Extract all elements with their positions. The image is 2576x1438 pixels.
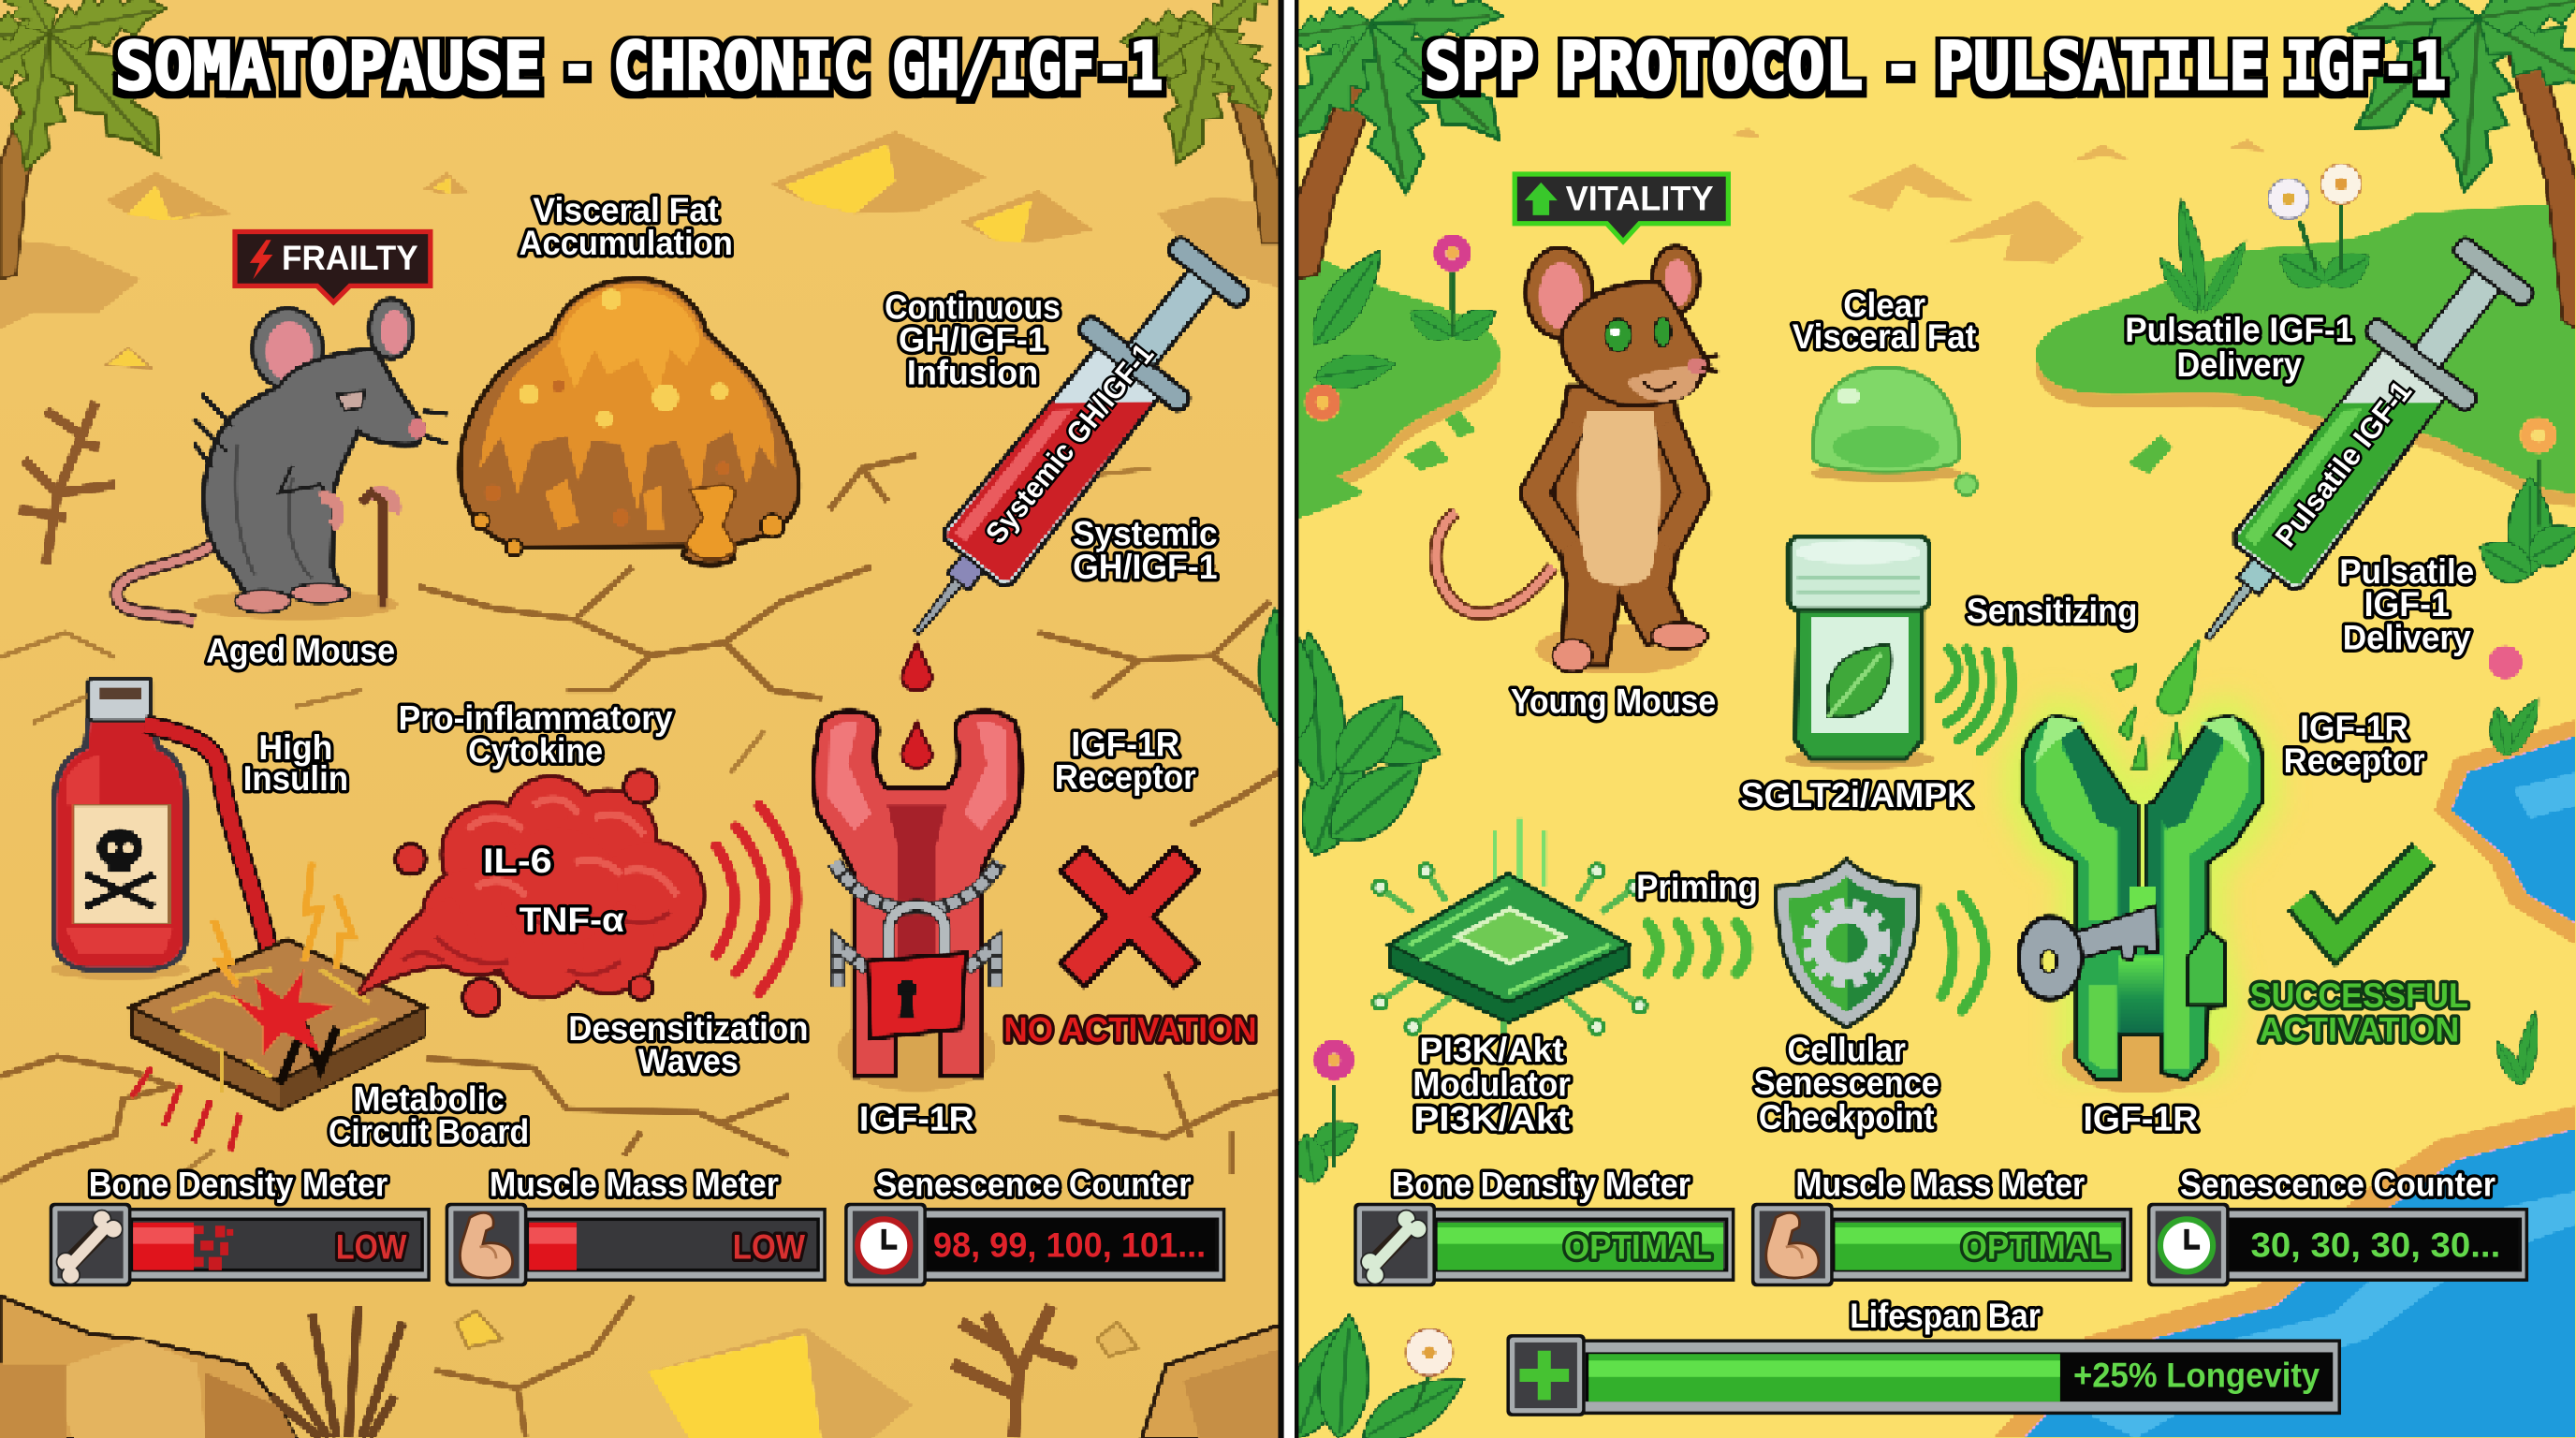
icon: jar [1786, 537, 1934, 769]
label: systemic [1073, 515, 1218, 586]
title: left [115, 28, 1164, 105]
label: young mouse: Young Mouse [1511, 682, 1716, 721]
icon: key [2019, 905, 2157, 999]
panel: left desert background [0, 0, 1280, 1438]
counter value: 98, 99, 100, 101... [933, 1226, 1206, 1265]
label: pulsatile delivery right: Delivery [2343, 618, 2471, 656]
counter value: 30, 30, 30, 30... [2250, 1226, 2500, 1265]
palm right panel left [1264, 0, 1525, 279]
title: left: - [562, 28, 593, 105]
flower pink [1434, 235, 1471, 271]
badge: frailty: FRAILTY [282, 239, 418, 277]
label: systemic: Systemic [1073, 515, 1218, 553]
flower white right [2321, 165, 2361, 204]
label: high insulin: Insulin [243, 759, 348, 798]
label: desensitization waves [568, 1009, 809, 1080]
icon: sensitizing waves [1939, 649, 2012, 751]
palm left [0, 0, 186, 279]
divider [1278, 0, 1298, 1438]
flower pink right [2489, 646, 2522, 679]
label: pulsatile delivery right: IGF-1 [2364, 585, 2450, 624]
label: pulsatile delivery right [2339, 552, 2474, 656]
panel: right beach background [1292, 0, 2576, 1438]
cytokine IL-6: IL-6 [483, 842, 552, 880]
label: metabolic circuit board: Circuit Board [329, 1113, 529, 1152]
icon: green check [2300, 855, 2423, 943]
label: PI3K/Akt modulator: Modulator [1412, 1065, 1571, 1104]
label: cellular senescence checkpoint [1754, 1031, 1939, 1137]
syringe label red: Systemic GH/IGF-1 [979, 337, 1160, 550]
label: cellular senescence checkpoint: Senescence [1754, 1064, 1939, 1102]
grass islands [1295, 202, 2576, 520]
title: left: CHRONIC [613, 28, 869, 105]
panel: right scenery [1249, 0, 2576, 1438]
label: igf-1r receptor right: IGF-1R [2300, 709, 2408, 747]
label: clear visceral fat: Clear [1843, 286, 1925, 325]
label: pro-inflammatory cytokine: Pro-inflammatory [399, 698, 673, 737]
label: clear visceral fat: Visceral Fat [1793, 317, 1976, 356]
label: igf-1r receptor [1055, 725, 1196, 796]
meter label: Bone Density Meter [1392, 1166, 1690, 1204]
label: igf-1r right: IGF-1R [2083, 1100, 2198, 1138]
label: sensitizing: Sensitizing [1967, 592, 2137, 630]
lifespan value: +25% Longevity [2073, 1356, 2320, 1394]
label: igf-1r receptor right [2284, 709, 2425, 780]
title: right [1425, 28, 2446, 105]
meter: bone density low [50, 1166, 431, 1286]
flower white left [2269, 179, 2308, 218]
title: right: SPP [1425, 28, 1534, 105]
icon: clear fat dome [1810, 368, 1976, 494]
label: pro-inflammatory cytokine [399, 698, 673, 770]
label: metabolic circuit board: Metabolic [353, 1079, 505, 1118]
icon: checkpoint waves [1942, 896, 1984, 1010]
label: igf-1r receptor: Receptor [1055, 757, 1196, 796]
label: continuous infusion: GH/IGF-1 [899, 321, 1046, 360]
label: visceral fat accumulation: Visceral Fat [534, 191, 719, 229]
label: igf-1r receptor: IGF-1R [1071, 725, 1179, 763]
title: right: IGF-1 [2285, 28, 2446, 105]
icon: aged mouse [117, 299, 446, 621]
syringe label green: Pulsatile IGF-1 [2268, 374, 2418, 553]
label: pulsatile delivery top: Pulsatile IGF-1 [2125, 311, 2353, 349]
label: desensitization waves: Waves [638, 1042, 739, 1080]
meter value: OPTIMAL [1564, 1227, 1712, 1266]
meter: muscle mass optimal [1751, 1166, 2132, 1286]
icon: green drops [2113, 640, 2198, 769]
icon: visceral fat mound [460, 279, 798, 565]
label: igf-1r receptor right: Receptor [2284, 741, 2425, 780]
meter value: OPTIMAL [1962, 1227, 2110, 1266]
title: right: - [1884, 28, 1917, 105]
label: high insulin: High [258, 728, 332, 767]
icon: PI3K chip [1373, 818, 1647, 1035]
icon: active IGF-1R receptor green [2023, 716, 2262, 1093]
icon: insulin stream [144, 725, 283, 1010]
icon: cytokine cloud [359, 770, 701, 1016]
icon: syringe green [2157, 223, 2552, 678]
title: left: SOMATOPAUSE [115, 28, 542, 105]
label: PI3K/Akt modulator: PI3K/Akt [1413, 1100, 1570, 1138]
flower orange right [2520, 418, 2556, 453]
water [1995, 720, 2576, 1438]
panel: left scenery [0, 0, 1291, 1438]
label: cellular senescence checkpoint: Cellular [1788, 1031, 1906, 1069]
icon: red drop [902, 644, 931, 690]
title: right: PROTOCOL [1559, 28, 1863, 105]
label: continuous infusion: Continuous [885, 287, 1061, 326]
meter label: Bone Density Meter [89, 1166, 388, 1204]
meter: senescence counter stable [2147, 1166, 2528, 1286]
palm right panel right [2334, 0, 2576, 329]
label: clear visceral fat [1793, 286, 1976, 356]
palm right [1116, 0, 1291, 243]
icon: metabolic circuit board [131, 862, 424, 1151]
title: left: GH/IGF-1 [892, 28, 1164, 105]
clock [2160, 1219, 2213, 1271]
meter label: Muscle Mass Meter [1795, 1166, 2085, 1204]
dunes [0, 131, 1280, 368]
text: successful activation: SUCCESSFUL [2250, 976, 2468, 1015]
text: no activation: NO ACTIVATION [1003, 1011, 1257, 1049]
label: metabolic circuit board [329, 1079, 529, 1152]
label: pulsatile delivery right: Pulsatile [2339, 552, 2474, 591]
label: aged mouse: Aged Mouse [206, 631, 395, 669]
meter label: Senescence Counter [2180, 1166, 2496, 1204]
meter value: LOW [336, 1227, 407, 1266]
label: priming: Priming [1636, 868, 1758, 906]
label: continuous infusion [885, 287, 1061, 392]
text: successful activation: ACTIVATION [2259, 1011, 2459, 1049]
icon: insulin bottle [51, 679, 189, 979]
cytokine TNF-alpha: TNF-α [520, 901, 624, 939]
icon: red X [1084, 871, 1175, 962]
dead tree bottom [953, 1306, 1076, 1438]
label: high insulin [243, 728, 348, 798]
icon: senescence shield [1776, 859, 1919, 1027]
icon: locked IGF-1R receptor red [814, 712, 1021, 1091]
flower pink lower [1314, 1040, 1354, 1079]
badge: vitality: VITALITY [1566, 180, 1714, 218]
text: successful activation [2250, 976, 2468, 1049]
cracks [0, 455, 1283, 1438]
label: cellular senescence checkpoint: Checkpoint [1759, 1098, 1935, 1137]
meter value: LOW [733, 1227, 805, 1266]
meter: senescence counter high [844, 1166, 1225, 1286]
label: pro-inflammatory cytokine: Cytokine [468, 731, 603, 770]
label: PI3K/Akt modulator [1412, 1031, 1571, 1138]
label: igf-1r: IGF-1R [859, 1100, 974, 1138]
dunes right [1732, 128, 2264, 263]
dead tree left [20, 403, 115, 564]
label: PI3K/Akt modulator: PI3K/Akt [1419, 1031, 1564, 1069]
label: visceral fat accumulation [520, 191, 733, 262]
plants and flowers [1249, 165, 2576, 1438]
icon: priming chevrons [1647, 923, 1748, 973]
meter: muscle mass low [446, 1166, 827, 1286]
label: desensitization waves: Desensitization [568, 1009, 809, 1048]
icon: young mouse [1435, 246, 1719, 674]
dry grass tuft [271, 1306, 402, 1438]
title: right: PULSATILE [1937, 28, 2265, 105]
label: systemic: GH/IGF-1 [1073, 548, 1218, 586]
icon: desensitization waves [716, 805, 797, 992]
label: pulsatile delivery top: Delivery [2177, 345, 2302, 384]
badge: vitality [1515, 174, 1728, 242]
label: SGLT2i/AMPK: SGLT2i/AMPK [1741, 776, 1972, 814]
flower white bottom [1406, 1329, 1453, 1375]
label: continuous infusion: Infusion [907, 354, 1038, 392]
meter: lifespan bar [1506, 1297, 2341, 1416]
badge: frailty [235, 231, 431, 302]
meter label: Senescence Counter [875, 1166, 1191, 1204]
meter label: Muscle Mass Meter [490, 1166, 779, 1204]
label: pulsatile delivery top [2125, 311, 2353, 384]
meter: bone density optimal [1354, 1166, 1734, 1286]
flower orange left [1305, 385, 1340, 420]
rocks and bottom dune [0, 1297, 1283, 1438]
lifespan label: Lifespan Bar [1850, 1297, 2041, 1335]
label: visceral fat accumulation: Accumulation [520, 224, 733, 262]
icon: syringe red [866, 222, 1266, 674]
clock [857, 1219, 910, 1271]
